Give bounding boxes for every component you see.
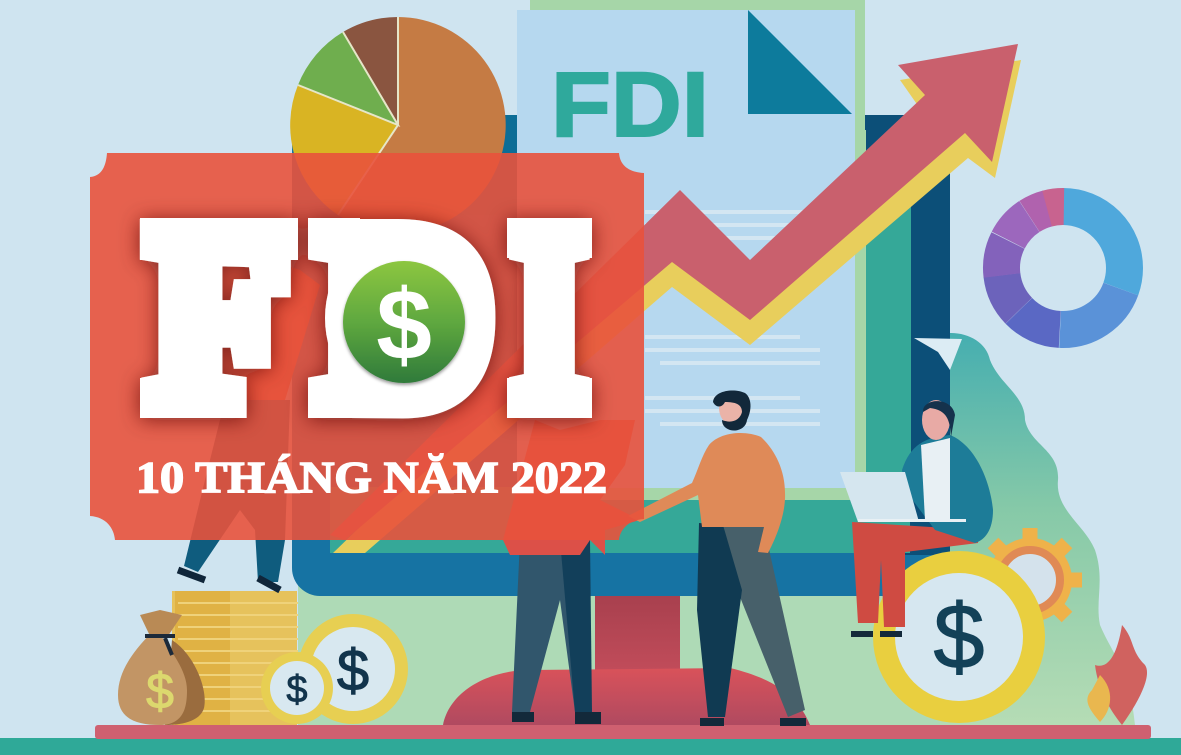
man in orange shirt: [628, 390, 806, 726]
dollar coin large: $: [337, 638, 369, 703]
big dollar coin: [873, 551, 1045, 723]
big dollar coin: $: [933, 586, 985, 688]
green dollar coin icon: [343, 261, 465, 383]
growth arrow: [330, 44, 1021, 553]
light green backdrop behind monitor: [298, 585, 1088, 727]
monitor stand: [443, 596, 810, 725]
red title panel: [90, 153, 644, 540]
woman in red shaking hands: [503, 420, 640, 724]
document fold corner: [748, 10, 852, 114]
document text lines: [645, 212, 820, 424]
title FDI letters: I: [515, 177, 584, 457]
monitor: [292, 115, 950, 596]
person with laptop: [840, 400, 993, 634]
person standing on coins: [178, 240, 320, 590]
title FDI letters: F: [151, 177, 286, 456]
title FDI letters: D: [320, 176, 491, 456]
leaf icon: [1087, 625, 1147, 725]
dollar coin small: $: [286, 669, 308, 711]
document with FDI title: [517, 0, 865, 500]
dollar coin large: [298, 614, 408, 724]
document heading: FDI: [551, 54, 709, 156]
green dollar coin icon: $: [376, 269, 432, 381]
donut chart: [976, 181, 1150, 355]
paper plane icon: [914, 338, 962, 370]
floor: [0, 725, 1181, 755]
gear icon: [978, 528, 1082, 632]
gold coin stack: [172, 591, 298, 725]
money bag icon: $: [146, 663, 174, 719]
money bag icon: [118, 610, 205, 725]
pie chart: [290, 17, 506, 233]
dollar coin small: [261, 652, 333, 724]
subtitle: 10 THÁNG NĂM 2022: [136, 453, 607, 502]
title FDI letters: [140, 176, 592, 457]
bush behind sitting person: [925, 333, 1135, 725]
